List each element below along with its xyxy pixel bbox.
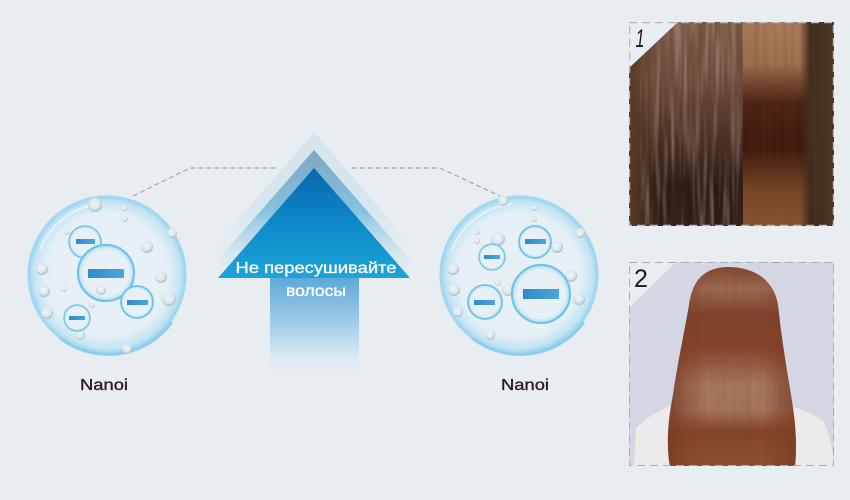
ion bubble large	[78, 245, 134, 301]
droplets	[36, 198, 177, 354]
ion bubble large	[512, 265, 570, 323]
central arrow	[214, 132, 414, 376]
arrow text second line: волосы	[286, 283, 346, 300]
ion bubble small	[479, 244, 505, 270]
left sphere with nano ions	[28, 196, 186, 354]
label: Nanoi right: Nanoi	[501, 377, 549, 394]
photo 1: damaged vs smooth hair	[629, 22, 834, 226]
white top	[634, 405, 834, 466]
dashed connector: left	[133, 168, 277, 196]
right sphere with nano ions	[440, 196, 598, 354]
dashed frame 2	[629, 262, 834, 466]
photo 2: long shiny hair	[629, 262, 834, 468]
hair	[668, 267, 796, 466]
ion bubble top	[519, 226, 551, 258]
ion bubble bottom left	[468, 285, 502, 319]
ion bubble bottom	[64, 305, 90, 331]
droplets right	[447, 196, 585, 340]
arrow text: Не пересушивайте	[236, 260, 397, 277]
number 1: 1	[636, 25, 644, 53]
corner cut 2	[629, 262, 676, 308]
corner cut	[629, 22, 678, 68]
ion bubble right	[121, 286, 153, 318]
number 2: 2	[634, 265, 648, 293]
ion bubble small top	[69, 226, 101, 258]
dashed frame	[629, 22, 834, 226]
label: Nanoi left: Nanoi	[80, 377, 128, 394]
dashed connector: right	[352, 168, 500, 196]
